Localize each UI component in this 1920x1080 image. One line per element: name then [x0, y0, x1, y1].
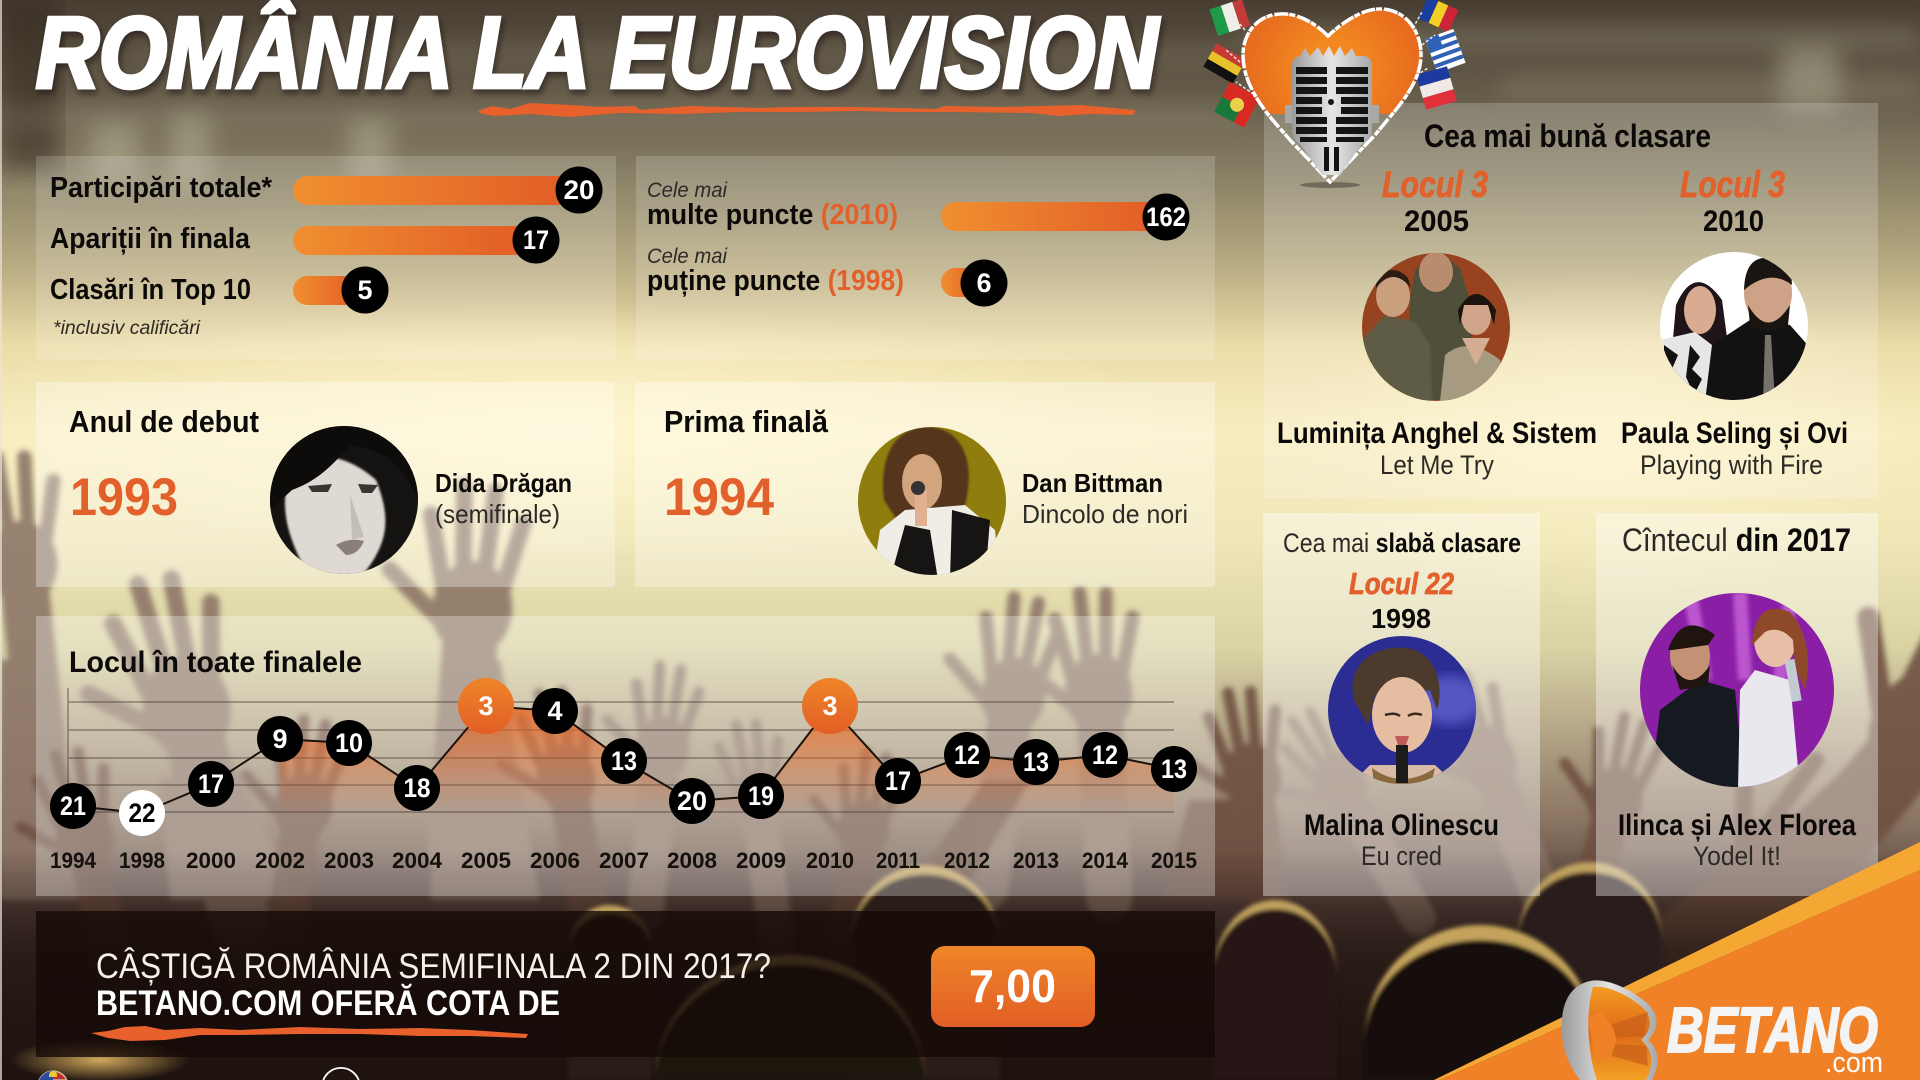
entry: 2005: 2005	[1404, 205, 1469, 238]
stat: fewest points: Cele mai	[647, 245, 728, 268]
stat: most points	[647, 179, 1190, 240]
year axis labels: 2006	[530, 848, 580, 873]
year axis labels: 2015	[1151, 848, 1197, 873]
data point: 2013: 13	[1023, 747, 1049, 777]
data point: 2000: 17	[198, 769, 224, 799]
note: (semifinale)	[435, 499, 560, 529]
data point: 1998	[119, 790, 165, 836]
microphone	[1285, 46, 1379, 175]
data point: 2014: 12	[1092, 740, 1118, 770]
stat: most points: 162	[1146, 202, 1186, 232]
flag: Romania	[1419, 0, 1458, 32]
brush underline	[91, 1026, 528, 1041]
year axis labels: 2004	[392, 848, 443, 873]
photo: Paula Seling și Ovi	[1660, 252, 1812, 402]
heading: Cea mai bună clasare	[1424, 118, 1711, 154]
logo mark	[1562, 980, 1658, 1080]
stat: Apariții în finala	[50, 216, 560, 264]
photo: Malina Olinescu	[1328, 636, 1484, 790]
heart	[1243, 9, 1421, 114]
stat: fewest points	[647, 245, 1008, 306]
data point: 2011	[875, 758, 921, 804]
data point: 2011: 17	[885, 766, 911, 796]
entry: 2010	[1621, 164, 1848, 480]
data point: 2002	[257, 716, 303, 762]
stat: most points: multe puncte (2010)	[647, 199, 898, 231]
data point: 2015: 13	[1161, 754, 1187, 784]
artist: Malina Olinescu	[1304, 809, 1499, 842]
data point: 2005: 3	[478, 691, 494, 721]
stat: Apariții în finala: 17	[523, 225, 549, 255]
data point: 2009	[738, 773, 784, 819]
odds button	[931, 946, 1095, 1027]
panel: best ranking	[1264, 103, 1878, 498]
data point: 2013	[1013, 739, 1059, 785]
year axis labels: 2014	[1082, 848, 1129, 873]
data point: 2009: 19	[748, 781, 774, 811]
year axis labels: 2003	[324, 848, 374, 873]
year: 1998	[1371, 603, 1431, 634]
data point: 2005	[458, 678, 514, 734]
data point: 2003	[326, 720, 372, 766]
panel: first final	[635, 382, 1215, 587]
year axis labels: 2000	[186, 848, 236, 873]
data point: 2008: 20	[677, 786, 707, 816]
data point: 2003: 10	[335, 728, 363, 758]
stat: most points: Cele mai	[647, 179, 728, 202]
name: Dan Bittman	[1022, 468, 1163, 498]
year axis labels: 2009	[736, 848, 786, 873]
year axis labels: 2011	[876, 848, 920, 873]
odds button: 7,00	[969, 960, 1056, 1012]
year axis labels	[50, 848, 1197, 873]
photo: Luminița Anghel & Sistem	[1362, 252, 1510, 402]
name: Dida Drăgan	[435, 468, 572, 498]
stat: Participări totale: 20	[564, 175, 594, 205]
data point: 2006	[532, 688, 578, 734]
song: Dincolo de nori	[1022, 499, 1188, 529]
data point: 2006: 4	[547, 696, 563, 726]
flag: France	[1416, 66, 1457, 110]
year: 1994	[664, 468, 774, 527]
artist: Ilinca și Alex Florea	[1618, 809, 1856, 842]
heading: Cîntecul din 2017	[1622, 522, 1851, 558]
footer: outline circle partially visible	[323, 1068, 359, 1080]
stat: Participări totale	[50, 166, 602, 214]
year axis labels: 2008	[667, 848, 717, 873]
song: Yodel It!	[1693, 841, 1781, 871]
data point: 1994: 21	[60, 791, 86, 821]
panel: worst ranking	[1263, 513, 1540, 896]
entry: 2005	[1277, 164, 1597, 480]
entry: 2010: Playing with Fire	[1640, 450, 1823, 480]
title: ROMÂNIA LA EUROVISION	[36, 0, 1160, 109]
data point: 2010	[802, 678, 858, 734]
line chart	[50, 678, 1197, 836]
stat: Participări totale: Participări totale*	[50, 172, 273, 204]
stat: fewest points: puține puncte (1998)	[647, 265, 904, 297]
photo: Ilinca și Alex Florea	[1640, 592, 1836, 790]
heading: Anul de debut	[69, 404, 259, 439]
entry: 2010: Paula Seling și Ovi	[1621, 417, 1848, 450]
heading: Cea mai slabă clasare	[1283, 528, 1521, 558]
rank: Locul 22	[1349, 566, 1454, 601]
song: Eu cred	[1361, 841, 1442, 871]
year axis labels: 2007	[599, 848, 649, 873]
data point: 2008	[669, 778, 715, 824]
year axis labels: 1998	[119, 848, 165, 873]
question: CÂȘTIGĂ ROMÂNIA SEMIFINALA 2 DIN 2017?	[96, 947, 771, 986]
data point: 2010: 3	[822, 691, 838, 721]
year axis labels: 1994	[50, 848, 97, 873]
flag: Germany	[1203, 43, 1246, 84]
photo: Dida Drăgan	[270, 426, 418, 578]
corner banner: Betano	[1434, 842, 1920, 1080]
offer text: BETANO.COM OFERĂ COTA DE	[96, 984, 560, 1023]
year axis labels: 2002	[255, 848, 305, 873]
year: 1993	[70, 468, 178, 527]
heading: Prima finală	[664, 404, 829, 439]
stat: Apariții în finala: Apariții în finala	[50, 223, 251, 255]
year axis labels: 2005	[461, 848, 511, 873]
entry: 2005: Let Me Try	[1380, 450, 1494, 480]
chart heading: Locul în toate finalele	[69, 646, 362, 679]
data point: 1994	[50, 783, 96, 829]
data point: 2007	[601, 738, 647, 784]
panel: points records	[636, 156, 1215, 360]
data point: 2012	[944, 732, 990, 778]
footnote: *inclusiv calificări	[53, 318, 201, 339]
stat: Clasări în Top 10: 5	[357, 275, 373, 305]
data point: 2012: 12	[954, 740, 980, 770]
panel: participation stats	[36, 156, 616, 360]
data point: 2007: 13	[611, 746, 637, 776]
data point: 2014	[1082, 732, 1128, 778]
year axis labels: 2013	[1013, 848, 1059, 873]
data point: 2004: 18	[404, 773, 430, 803]
data point: 2002: 9	[272, 724, 288, 754]
year axis labels: 2012	[944, 848, 990, 873]
flag: Portugal	[1214, 82, 1260, 128]
entry: 2005: Luminița Anghel & Sistem	[1277, 417, 1597, 450]
panel: final rankings chart	[36, 616, 1215, 896]
flag: Italy	[1209, 0, 1250, 36]
entry: 2005: Locul 3	[1382, 164, 1488, 205]
year axis labels: 2010	[806, 848, 854, 873]
panel: betting odds callout	[36, 911, 1215, 1057]
entry: 2010: Locul 3	[1680, 164, 1785, 205]
panel: 2017 song	[1596, 513, 1878, 896]
data point: 1998: 22	[128, 798, 156, 828]
entry: 2010: 2010	[1703, 205, 1764, 238]
stat: Clasări în Top 10	[50, 266, 388, 314]
data point: 2004	[394, 765, 440, 811]
stat: fewest points: 6	[976, 268, 992, 298]
data point: 2000	[188, 761, 234, 807]
panel: debut year	[36, 382, 615, 587]
footer: emblem partially visible	[39, 1071, 67, 1080]
data point: 2015	[1151, 746, 1197, 792]
title brush underline	[478, 103, 1135, 117]
stat: Clasări în Top 10: Clasări în Top 10	[50, 274, 251, 306]
icon: heart with microphone and flags	[1203, 0, 1466, 188]
domain: .com	[1825, 1047, 1883, 1079]
photo: Dan Bittman	[858, 427, 1006, 580]
flag: Greece	[1425, 29, 1466, 73]
crowd heads with golden rim light	[568, 862, 1662, 1080]
